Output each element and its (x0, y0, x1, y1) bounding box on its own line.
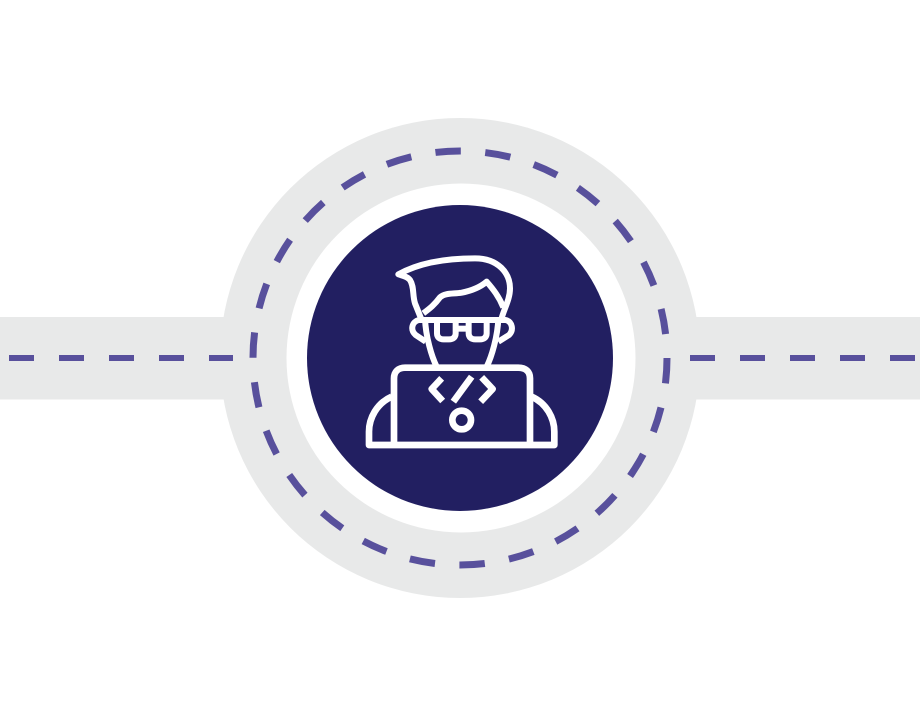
laptop (394, 368, 530, 445)
outer grey ring (220, 118, 700, 598)
glasses frame (412, 320, 512, 342)
navy centre disc (307, 205, 613, 511)
torso and laptop (369, 368, 554, 445)
icon: developer with laptop (369, 258, 554, 445)
hair (398, 258, 510, 321)
road band (0, 317, 920, 400)
head (398, 258, 512, 367)
left road dashes (9, 355, 233, 361)
right lens (469, 320, 487, 339)
code symbols (432, 377, 493, 402)
laptop logo (452, 411, 471, 429)
glasses bridge (456, 320, 469, 338)
right road dashes (690, 355, 915, 361)
left lens (437, 320, 456, 339)
face (425, 318, 498, 367)
white inner ring (286, 184, 636, 532)
dashed circular track (253, 151, 667, 565)
hairline (423, 282, 503, 313)
body and shoulders (369, 397, 554, 445)
